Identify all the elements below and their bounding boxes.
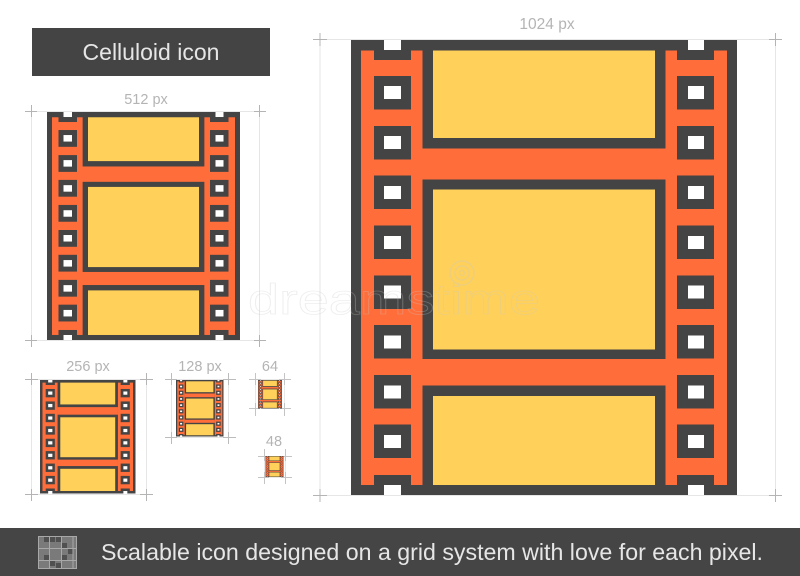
- title banner: Celluloid icon: [82, 39, 219, 65]
- label: 128 px: 128 px: [178, 359, 223, 375]
- icon: film strip 128 px: [176, 380, 224, 436]
- label: 64: 64: [262, 359, 278, 375]
- size guides: 64 px: [249, 373, 291, 416]
- icon: large film strip 1024 px: [351, 40, 737, 495]
- size guides: 256 px: [25, 373, 153, 501]
- size guides: 1024 px: [313, 33, 782, 502]
- label: 256 px: 256 px: [66, 359, 111, 375]
- size guides: 48 px: [258, 449, 292, 484]
- icon: film strip 512 px: [47, 112, 240, 340]
- size guides: 128 px: [165, 373, 236, 444]
- icon: film strip 64 px: [258, 380, 282, 408]
- icon: film strip 256 px: [40, 380, 136, 494]
- label: 48: 48: [266, 434, 282, 450]
- label: 512 px: 512 px: [124, 92, 169, 108]
- footer text: Scalable icon designed on a grid system with love for each pixel.: [101, 539, 763, 565]
- size guides: 512 px: [25, 105, 266, 347]
- title banner: [32, 28, 270, 76]
- watermark: dreamstime: [248, 276, 540, 324]
- footer bar: [0, 528, 800, 576]
- icon: film strip 48 px: [266, 456, 284, 477]
- label: 1024 px: 1024 px: [519, 16, 575, 33]
- watermark: [248, 261, 540, 324]
- icon: pixel grid: [38, 536, 77, 569]
